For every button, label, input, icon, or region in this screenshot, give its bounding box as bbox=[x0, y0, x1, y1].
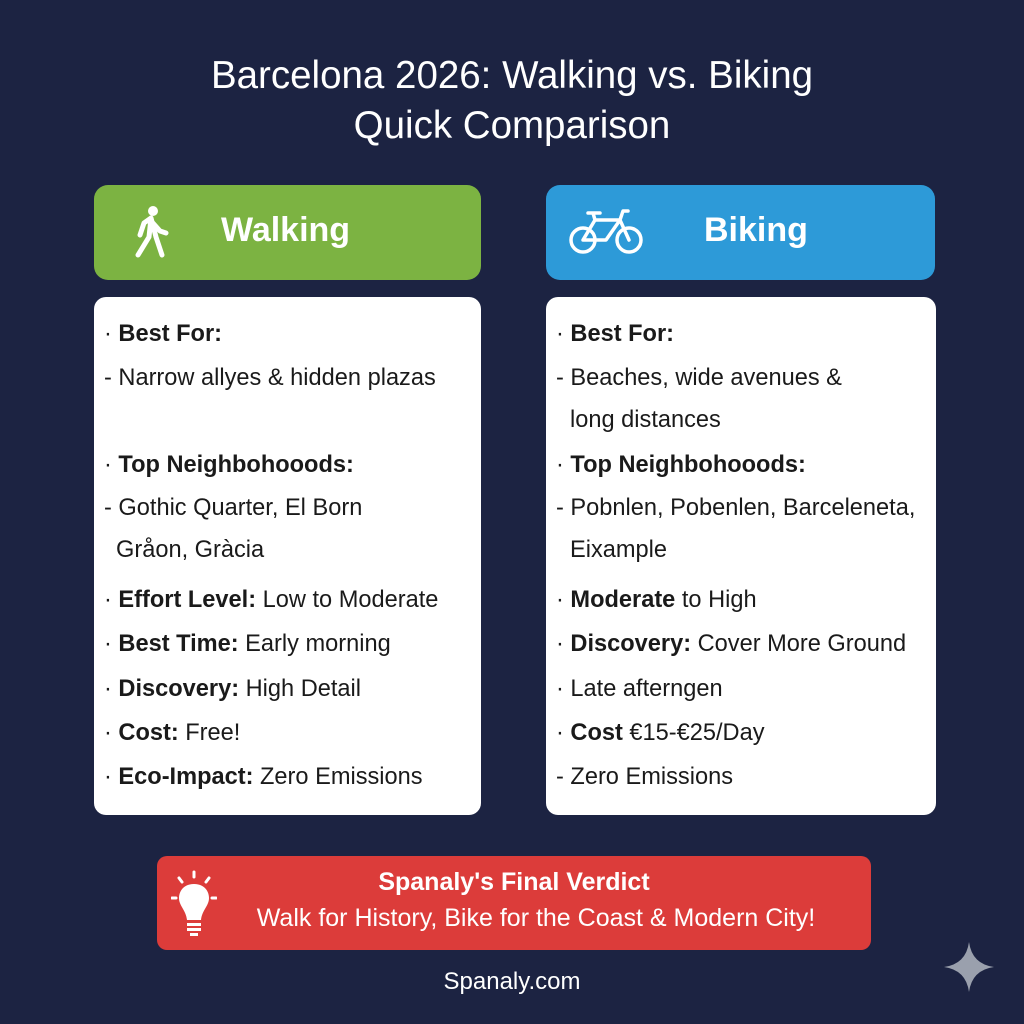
panel: walking details: · Cost: Free! bbox=[104, 720, 240, 746]
panel: biking details: Eixample bbox=[570, 537, 667, 563]
panel: biking details: · Best For: bbox=[556, 321, 674, 347]
title: Barcelona 2026: Walking vs. Biking bbox=[211, 54, 813, 97]
panel: biking details: - Beaches, wide avenues & bbox=[556, 365, 842, 391]
header: walking: Walking bbox=[221, 211, 350, 249]
title: Quick Comparison bbox=[354, 104, 670, 147]
callout: final verdict: Walk for History, Bike for the Coast & Modern City! bbox=[257, 904, 815, 932]
panel: biking details: · Moderate to High bbox=[556, 587, 757, 613]
panel: walking details: · Eco-Impact: Zero Emissions bbox=[104, 764, 423, 790]
panel: biking details: · Top Neighbohooods: bbox=[556, 452, 806, 478]
panel: walking details: · Discovery: High Detail bbox=[104, 676, 361, 702]
icon: bicycle bbox=[569, 209, 643, 254]
icon: walker bbox=[136, 206, 168, 258]
panel: walking details: - Gothic Quarter, El Born bbox=[104, 495, 362, 521]
footer: Spanaly.com bbox=[444, 968, 580, 995]
panel: walking details: · Effort Level: Low to Moderate bbox=[104, 587, 438, 613]
icon: sparkle bbox=[944, 942, 994, 992]
panel: biking details: long distances bbox=[570, 407, 721, 433]
callout: final verdict: Spanaly's Final Verdict bbox=[378, 868, 650, 896]
header: biking: Biking bbox=[704, 211, 808, 249]
panel: walking details: · Best For: bbox=[104, 321, 222, 347]
icon: light bulb bbox=[171, 870, 217, 936]
panel: walking details: - Narrow allyes & hidden plazas bbox=[104, 365, 436, 391]
panel: biking details: · Cost €15-€25/Day bbox=[556, 720, 765, 746]
panel: walking details: Gråon, Gràcia bbox=[116, 537, 264, 563]
panel: biking details: - Pobnlen, Pobenlen, Barceleneta, bbox=[556, 495, 915, 521]
callout: final verdict bbox=[157, 856, 871, 950]
panel: walking details bbox=[94, 297, 481, 815]
panel: biking details bbox=[546, 297, 936, 815]
panel: walking details: · Top Neighbohooods: bbox=[104, 452, 354, 478]
panel: biking details: · Discovery: Cover More Ground bbox=[556, 631, 906, 657]
panel: biking details: - Zero Emissions bbox=[556, 764, 733, 790]
panel: biking details: · Late afterngen bbox=[556, 676, 723, 702]
title bbox=[211, 54, 813, 147]
header: walking bbox=[94, 185, 481, 280]
header: biking bbox=[546, 185, 935, 280]
panel: walking details: · Best Time: Early morning bbox=[104, 631, 391, 657]
